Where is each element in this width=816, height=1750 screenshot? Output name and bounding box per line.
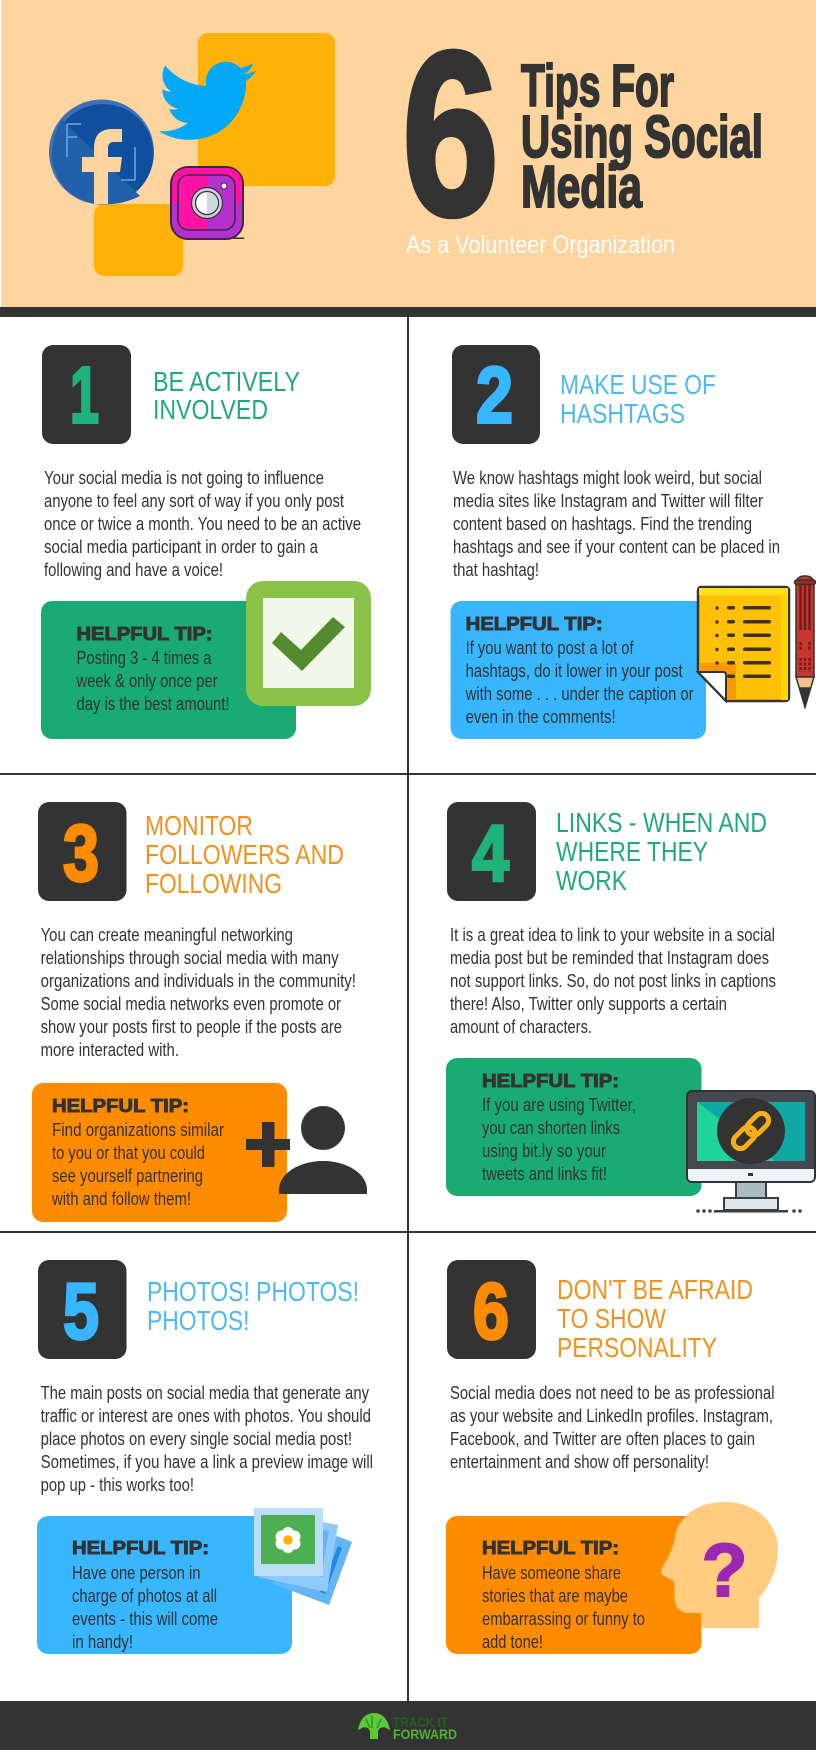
callout: helpful tip 2: with some . . . under the caption or (465, 684, 694, 704)
heading 2 (560, 369, 716, 429)
panel: tip 3 (32, 802, 367, 1222)
callout: helpful tip 6: Have someone share (482, 1563, 621, 1583)
icon: twitter bird (158, 62, 256, 140)
callout: helpful tip 5: charge of photos at all (72, 1586, 217, 1606)
subtitle: As a Volunteer Organization (406, 231, 675, 259)
heading 2: MAKE USE OF (560, 369, 716, 400)
callout: helpful tip 3 (32, 1083, 287, 1222)
body text 2: media sites like Instagram and Twitter will filter (453, 491, 763, 511)
callout: helpful tip 4: using bit.ly so your (482, 1141, 606, 1161)
panel: tip 2 (450, 345, 816, 739)
body text 3: more interacted with. (41, 1040, 179, 1060)
title: Tips For (521, 53, 674, 119)
footer bar (0, 1701, 816, 1750)
number badge 5 (38, 1260, 126, 1359)
callout: helpful tip 3: Find organizations similar (52, 1120, 224, 1140)
heading 5: PHOTOS! PHOTOS! (147, 1276, 359, 1307)
icon: instagram (171, 167, 244, 239)
logo: tree (358, 1713, 390, 1739)
heading 1: INVOLVED (153, 394, 268, 425)
heading 6: TO SHOW (557, 1303, 666, 1334)
heading 1: BE ACTIVELY (153, 366, 300, 397)
panel: tip 5 (37, 1260, 373, 1654)
body text 5: The main posts on social media that generate any (41, 1383, 369, 1403)
number badge 2: 2 (476, 350, 513, 440)
heading 6: PERSONALITY (557, 1332, 717, 1363)
number badge 6 (447, 1260, 536, 1359)
heading 1 (153, 366, 300, 425)
number badge 6: 6 (473, 1266, 509, 1356)
body text 4: amount of characters. (450, 1017, 592, 1037)
callout: helpful tip 6 (446, 1516, 702, 1654)
decorative orange square small (94, 204, 183, 276)
icon: facebook (49, 100, 154, 204)
heading 4: WHERE THEY (556, 836, 708, 867)
body text 5: Sometimes, if you have a link a preview image will (41, 1452, 373, 1472)
body text 1: Your social media is not going to influence (44, 468, 324, 488)
callout: helpful tip 5: in handy! (72, 1632, 133, 1652)
body text 3: organizations and individuals in the community! (41, 971, 356, 991)
body text 6 (450, 1383, 774, 1472)
heading 6: DON'T BE AFRAID (557, 1274, 753, 1305)
number badge 1 (42, 345, 131, 444)
callout: helpful tip 5: Have one person in (72, 1563, 200, 1583)
callout: helpful tip 5: events - this will come (72, 1609, 218, 1629)
callout: helpful tip 1: day is the best amount! (76, 694, 230, 714)
callout: helpful tip 3: HELPFUL TIP: (52, 1096, 189, 1116)
callout: helpful tip 4: you can shorten links (482, 1118, 620, 1138)
body text 2 (453, 468, 780, 580)
callout: helpful tip 4 (446, 1058, 702, 1196)
heading 4: WORK (556, 865, 627, 896)
number badge 3: 3 (63, 808, 99, 898)
icon: head with question mark: ? (702, 1528, 747, 1612)
body text 2: that hashtag! (453, 560, 539, 580)
icon: head with question mark (661, 1502, 778, 1628)
body text 5: pop up - this works too! (41, 1475, 194, 1495)
panel: tip 1 (41, 345, 371, 739)
number badge 2 (452, 345, 540, 444)
title numeral: 6 (402, 2, 499, 264)
body text 4: there! Also, Twitter only supports a certain (450, 994, 727, 1014)
body text 1: once or twice a month. You need to be an active (44, 514, 361, 534)
callout: helpful tip 1: HELPFUL TIP: (76, 624, 212, 644)
icon: notepad (698, 587, 789, 701)
body text 5: traffic or interest are ones with photos. You should (41, 1406, 371, 1426)
body text 3: You can create meaningful networking (41, 925, 293, 945)
heading 5 (147, 1276, 359, 1336)
body text 4 (450, 925, 776, 1037)
body text 3: Some social media networks even promote or (41, 994, 341, 1014)
body text 5: place photos on every single social media post! (41, 1429, 352, 1449)
panel: tip 6 (446, 1260, 778, 1654)
body text 3: relationships through social media with many (41, 948, 339, 968)
heading 3: FOLLOWING (145, 868, 282, 899)
body text 6: entertainment and show off personality! (450, 1452, 709, 1472)
callout: helpful tip 2: even in the comments! (466, 707, 616, 727)
callout: helpful tip 1: Posting 3 - 4 times a (76, 648, 212, 668)
icon: monitor with link (687, 1091, 815, 1213)
callout: helpful tip 2: If you want to post a lot of (466, 638, 634, 658)
icon: photos (254, 1508, 352, 1605)
body text 5 (41, 1383, 373, 1495)
panel: tip 4 (446, 802, 815, 1213)
heading 6 (557, 1274, 753, 1363)
number badge 1: 1 (70, 350, 99, 440)
number badge 5: 5 (63, 1266, 99, 1356)
number badge 4 (447, 802, 536, 901)
heading 2: HASHTAGS (560, 398, 685, 429)
heading 3: FOLLOWERS AND (145, 839, 344, 870)
callout: helpful tip 6: HELPFUL TIP: (482, 1538, 619, 1558)
number badge 3 (38, 802, 126, 901)
number badge 4: 4 (472, 808, 509, 898)
callout: helpful tip 3: with and follow them! (51, 1189, 191, 1209)
icon: check box (246, 581, 371, 706)
body text 2: We know hashtags might look weird, but social (453, 468, 762, 488)
body text 1: anyone to feel any sort of way if you only post (44, 491, 344, 511)
callout: helpful tip 2 (450, 601, 706, 739)
decorative orange square large (198, 33, 335, 186)
body text 6: Facebook, and Twitter are often places to gain (450, 1429, 755, 1449)
body text 1: social media participant in order to gain a (44, 537, 319, 557)
header banner (0, 0, 816, 317)
logo: wordmark (393, 1714, 457, 1742)
icon: pencil (794, 576, 816, 707)
callout: helpful tip 2: HELPFUL TIP: (466, 614, 603, 634)
callout: helpful tip 1: week & only once per (76, 671, 218, 691)
callout: helpful tip 5: HELPFUL TIP: (72, 1538, 209, 1558)
callout: helpful tip 3: to you or that you could (52, 1143, 205, 1163)
callout: helpful tip 6: stories that are maybe (482, 1586, 628, 1606)
logo: wordmark: TRACK IT (393, 1714, 448, 1730)
body text 2: content based on hashtags. Find the trending (453, 514, 752, 534)
callout: helpful tip 4: If you are using Twitter, (482, 1095, 636, 1115)
title: Media (521, 154, 643, 220)
heading 3 (145, 810, 344, 899)
callout: helpful tip 2: hashtags, do it lower in your post (466, 661, 683, 681)
callout: helpful tip 3: see yourself partnering (52, 1166, 203, 1186)
callout: helpful tip 1 (41, 601, 296, 739)
body text 1: following and have a voice! (44, 560, 223, 580)
callout: helpful tip 4: HELPFUL TIP: (482, 1071, 619, 1091)
callout: helpful tip 5 (37, 1516, 292, 1654)
callout: helpful tip 4: tweets and links fit! (482, 1164, 607, 1184)
body text 3: show your posts first to people if the posts are (41, 1017, 342, 1037)
logo: wordmark: FORWARD (393, 1726, 457, 1742)
body text 3 (41, 925, 356, 1060)
heading 3: MONITOR (145, 810, 253, 841)
heading 4 (556, 807, 767, 896)
heading 5: PHOTOS! (147, 1305, 250, 1336)
callout: helpful tip 6: embarrassing or funny to (482, 1609, 645, 1629)
callout: helpful tip 6: add tone! (482, 1632, 543, 1652)
body text 1 (44, 468, 361, 580)
heading 4: LINKS - WHEN AND (556, 807, 767, 838)
icon: add person (246, 1106, 367, 1194)
title (521, 53, 763, 220)
